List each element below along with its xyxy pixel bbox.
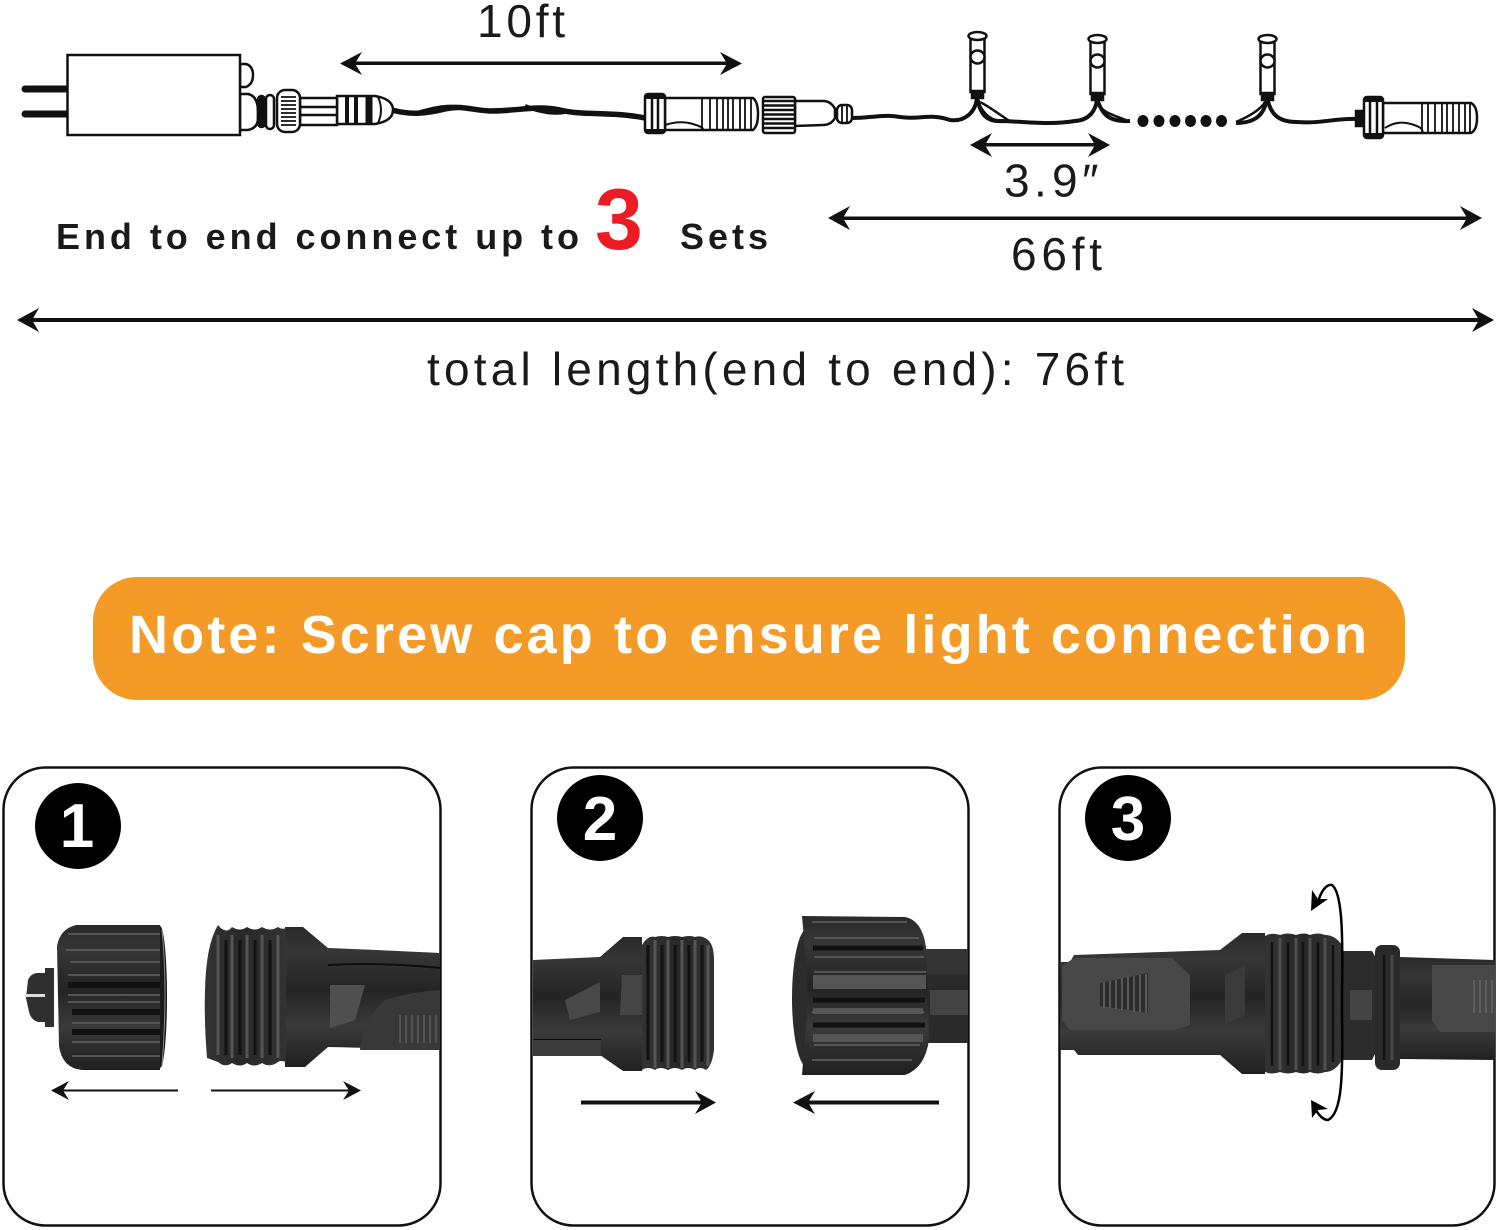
- controller box: [68, 55, 258, 135]
- first wire: [392, 106, 645, 118]
- panel: step 1: [4, 768, 440, 1226]
- continuation dots: [1138, 115, 1227, 127]
- light string wires: [852, 97, 1358, 123]
- red number 3: 3: [595, 172, 643, 268]
- cap photo: [792, 916, 968, 1075]
- female connector: [645, 94, 758, 133]
- 3.9 inch label: ″: [1080, 154, 1098, 206]
- assembled connector photo: [1060, 933, 1495, 1074]
- sets text: Sets: [680, 216, 768, 257]
- connect up to text: End to end connect up to: [56, 216, 579, 257]
- plug prongs: [25, 89, 67, 114]
- note text: Note: Screw cap to ensure light connection: [129, 605, 1367, 665]
- note banner: [93, 577, 1405, 700]
- 66ft label: 66ft: [1011, 228, 1102, 280]
- bulb 2: [1088, 35, 1106, 100]
- total length label: total length(end to end): 76ft: [427, 343, 1124, 395]
- step 1 badge: [35, 783, 121, 869]
- step 1 badge: 1: [60, 792, 94, 861]
- total length arrow: [17, 308, 1494, 332]
- rotation arrow: [1311, 885, 1342, 1120]
- 3.9 inch arrow: [970, 133, 1110, 157]
- outward arrows: [51, 1081, 361, 1100]
- 3.9 inch label: 9: [1052, 154, 1078, 206]
- end connector: [1356, 97, 1477, 138]
- light string start connector: [763, 97, 852, 133]
- wiring diagram: [25, 32, 1477, 138]
- step 3 badge: [1085, 775, 1171, 861]
- male plug connector: [258, 90, 393, 132]
- 66ft arrow: [828, 206, 1482, 230]
- inward arrows: [581, 1091, 939, 1114]
- threaded connector photo: [533, 936, 714, 1071]
- bulb 1: [968, 32, 986, 98]
- threaded connector photo: [205, 925, 440, 1067]
- panel: step 2: [532, 768, 968, 1226]
- panel: step 3: [1060, 768, 1495, 1226]
- 3.9 inch label: 3: [1004, 154, 1030, 206]
- cap photo: [25, 925, 167, 1070]
- step 2 badge: 2: [583, 785, 617, 854]
- 10ft arrow: [340, 52, 742, 75]
- step 3 badge: 3: [1111, 785, 1145, 854]
- 3.9 inch label: .: [1034, 154, 1047, 206]
- bulb 3: [1258, 35, 1276, 100]
- step 2 badge: [557, 775, 643, 861]
